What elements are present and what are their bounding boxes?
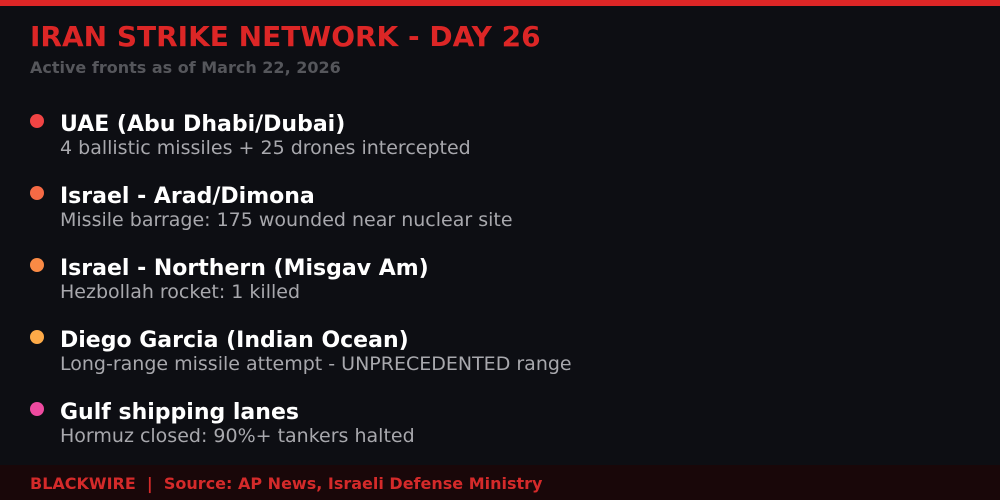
item: Israel Arad/Dimona: Israel - Arad/Dimona [60,184,315,209]
item: Gulf shipping: Gulf shipping lanes [60,400,299,425]
top accent bar [0,0,1000,6]
item: Diego Garcia: Long-range missile attempt - UNPRECEDENTED range [60,353,572,375]
item: Israel Arad/Dimona: Missile barrage: 175 wounded near nuclear site [60,209,513,231]
item: UAE: UAE (Abu Dhabi/Dubai) [60,112,345,137]
footer: BLACKWIRE | Source: AP News, Israeli Defense Ministry [30,474,543,494]
item: Gulf shipping [30,400,415,447]
item: Israel Arad/Dimona [30,184,513,231]
item: Gulf shipping: Hormuz closed: 90%+ tankers halted [60,425,415,447]
item: Israel Northern: Hezbollah rocket: 1 killed [60,281,300,303]
item: Diego Garcia: Diego Garcia (Indian Ocean) [60,328,409,353]
item: UAE [30,112,471,159]
title: IRAN STRIKE NETWORK - DAY 26 [30,20,541,53]
item: Diego Garcia [30,328,572,375]
item: Israel Northern: Israel - Northern (Misgav Am) [60,256,429,281]
footer [0,465,1000,500]
item: Israel Northern [30,256,429,303]
item: UAE: 4 ballistic missiles + 25 drones intercepted [60,137,471,159]
subtitle: Active fronts as of March 22, 2026 [30,58,341,77]
